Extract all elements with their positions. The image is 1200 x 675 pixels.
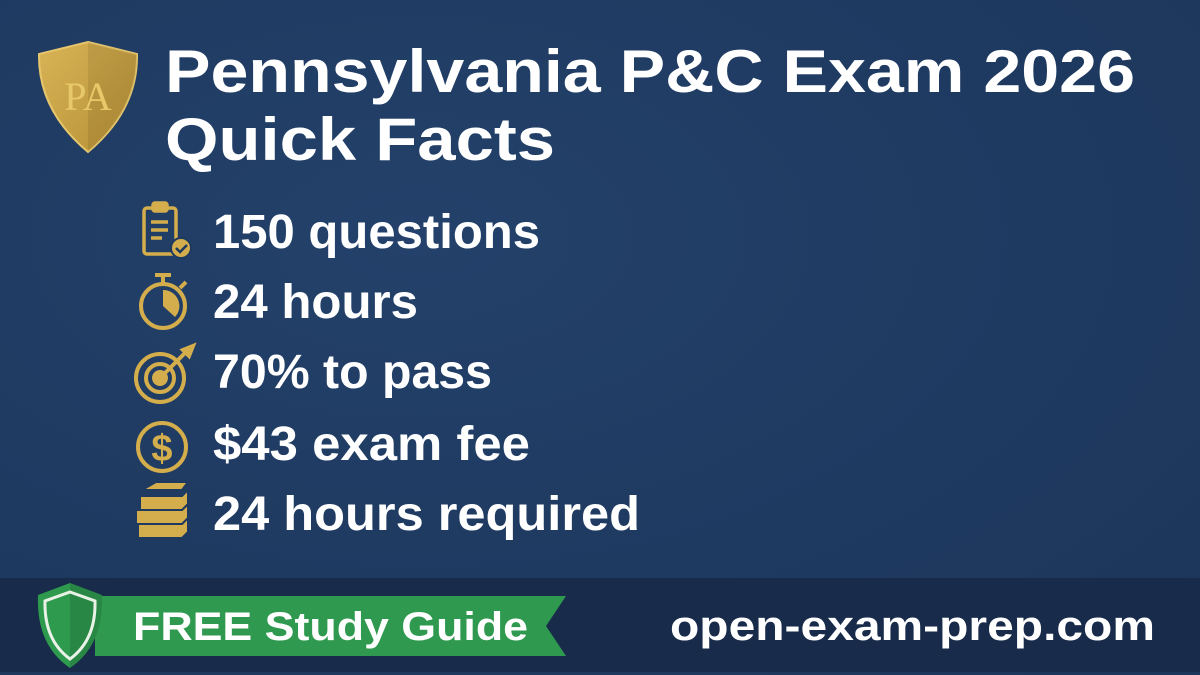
fact: pass: 70% to pass xyxy=(213,346,492,399)
icon: clipboard xyxy=(144,203,191,258)
ribbon xyxy=(95,596,566,656)
fact: fee: $43 exam fee xyxy=(213,418,530,471)
icon: green shield xyxy=(38,583,102,668)
ribbon text: FREE Study Guide xyxy=(133,605,528,649)
fact: hours: 24 hours xyxy=(213,276,418,329)
title: Quick Facts xyxy=(165,106,555,173)
fact: questions: 150 questions xyxy=(213,206,540,259)
fact: required: 24 hours required xyxy=(213,488,640,541)
icon: PA shield: PA xyxy=(64,74,112,119)
title: Pennsylvania P&C Exam 2026 xyxy=(165,38,1135,105)
icon: stopwatch xyxy=(141,275,186,328)
icon: dollar: $ xyxy=(151,428,173,470)
icon: books xyxy=(136,482,188,538)
footer band xyxy=(0,578,1200,672)
title xyxy=(165,38,1135,173)
icon: dollar xyxy=(138,423,186,471)
url: open-exam-prep.com xyxy=(670,602,1155,649)
icon: target xyxy=(136,346,193,402)
fact list xyxy=(136,203,640,541)
icon: PA shield xyxy=(39,42,137,152)
